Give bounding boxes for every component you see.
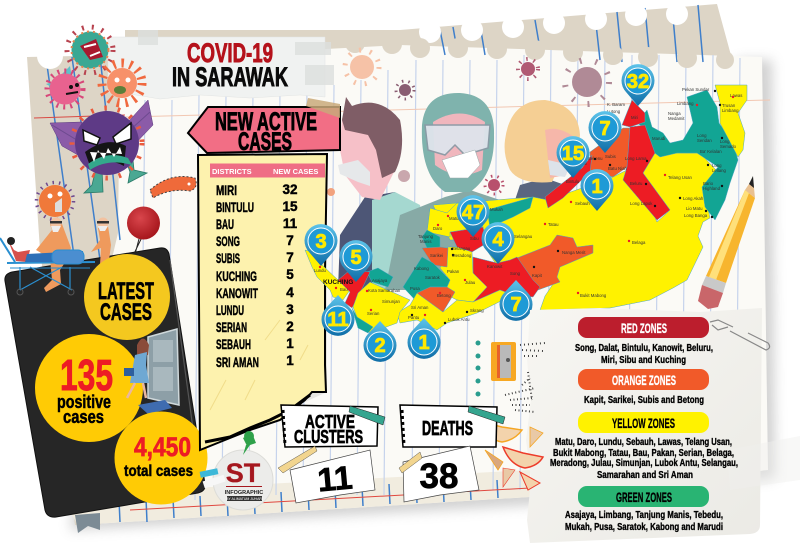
orange Betong — [417, 287, 455, 312]
map place labels: Miri — [631, 115, 638, 120]
panel: new active cases table: 7 — [286, 233, 294, 248]
deaths number note: 38 — [420, 457, 458, 496]
faint background viruses — [327, 50, 609, 196]
map place labels: Limbang — [722, 108, 739, 113]
icon: orange virus — [102, 63, 142, 103]
red Kuching — [338, 270, 370, 308]
green zones: Asajaya, Limbang, Tanjung Manis, Tebedu, — [565, 509, 723, 521]
map place labels: Lio Matu — [686, 206, 703, 211]
map place labels: Bintulu — [566, 179, 580, 184]
orange Kapit — [517, 235, 593, 290]
icon: safety pin — [710, 320, 770, 350]
map place labels: Meradong — [452, 253, 472, 258]
green Mukah — [487, 197, 533, 227]
pin: Sri Aman 1 — [408, 318, 440, 359]
green Tebedu — [352, 308, 373, 333]
map place labels: Tatau — [548, 222, 559, 227]
red Bintulu — [545, 155, 592, 208]
orange Sarikei — [422, 247, 448, 267]
map place labels: Belaga — [632, 240, 646, 245]
ST logo badge: BY ALIMATUM JUHARI — [226, 497, 263, 501]
pencil dust — [505, 343, 545, 412]
icon: medics with stretcher — [0, 218, 111, 296]
map place labels: Long Akah — [683, 196, 704, 201]
table rows: SUBIS — [216, 251, 240, 266]
map place labels: Batu Niah — [608, 166, 627, 171]
panel: new active cases table: 1 — [286, 353, 294, 368]
map place labels: Nanga — [668, 111, 681, 116]
map place labels: Semado — [720, 144, 737, 149]
panel: people — [338, 93, 580, 290]
pin: Subis 7: 7 — [599, 118, 611, 140]
icon: red pin — [127, 206, 160, 262]
icon: purple bat virus — [50, 100, 153, 193]
map place labels: Trusan — [722, 103, 736, 108]
red zones — [575, 317, 713, 366]
map place labels: Lellang — [712, 168, 726, 173]
map place labels: Kabong — [414, 266, 429, 271]
table rows: MIRI — [216, 183, 237, 198]
map place labels: Julau — [465, 280, 476, 285]
map place labels: Medamit — [668, 116, 685, 121]
orange zones — [578, 369, 709, 406]
yellow zones — [550, 412, 738, 481]
map place labels: Sebauh — [575, 201, 590, 206]
map place labels: Bekenu — [588, 156, 603, 161]
map place labels: Sarikei — [430, 253, 443, 258]
pin: Kanowit 4 — [482, 222, 514, 264]
map place labels: Pakan — [447, 269, 460, 274]
yellow Daro Matu — [427, 203, 483, 237]
icon: small orange virus — [36, 182, 74, 220]
map place labels: Ba' Kelalan — [700, 149, 722, 154]
table rows: BINTULU — [216, 200, 254, 215]
map place labels: Long Lapok — [630, 201, 653, 206]
panel: new active cases table: 15 — [282, 199, 298, 214]
map place labels: Song — [510, 271, 521, 276]
map place labels: Bau — [340, 287, 348, 292]
yellow zones: Samarahan and Sri Aman — [597, 469, 693, 481]
table rows — [216, 183, 259, 370]
red Miri — [622, 100, 645, 127]
map place labels: Serian — [367, 311, 380, 316]
circle: positive cases: cases — [63, 407, 104, 427]
map place labels: Daro — [433, 226, 443, 231]
icon: pencil — [698, 176, 755, 309]
map place labels: Lutong — [607, 109, 621, 114]
map place labels: Pantu — [408, 315, 420, 320]
map place labels: Saratok — [425, 275, 441, 280]
map place labels: Sri Aman — [411, 305, 429, 310]
panel: new active cases table: 32 — [282, 182, 298, 197]
green zones: Mukah, Pusa, Saratok, Kabong and Marudi — [565, 521, 723, 533]
pin: Kanowit 4: 4 — [492, 229, 504, 251]
red zones: Miri, Sibu and Kuching — [601, 354, 686, 366]
title strip — [108, 30, 334, 99]
circle: total cases: 4,450 — [134, 432, 191, 462]
orange zones: Kapit, Sarikei, Subis and Betong — [584, 394, 704, 406]
map place labels: Selangau — [452, 246, 471, 251]
title strip: IN SARAWAK — [172, 62, 288, 92]
map place labels: Betong — [437, 293, 451, 298]
map place labels: Lubok Antu — [448, 317, 470, 322]
yellow zones: Bukit Mabong, Tatau, Bau, Pakan, Serian, Belaga, — [553, 447, 734, 459]
map place labels: Highland — [703, 186, 721, 191]
map place labels: Lawas — [730, 93, 742, 98]
pin: Kuching 5: 5 — [350, 247, 362, 269]
pin: Serian 2: 2 — [374, 335, 386, 357]
clusters label card: CLUSTERS — [294, 427, 363, 447]
table rows: SERIAN — [216, 320, 247, 335]
yellow zones: YELLOW ZONES — [612, 415, 675, 431]
circle: total cases: total cases — [124, 463, 193, 480]
pin: Song 7: 7 — [510, 294, 522, 316]
map place labels — [314, 87, 742, 324]
yellow Sri Aman — [397, 290, 513, 330]
map place labels: Manis — [420, 239, 431, 244]
table rows: KANOWIT — [216, 286, 258, 301]
green zones: GREEN ZONES — [616, 489, 672, 505]
panel: zone legend — [526, 308, 800, 543]
panel: new active cases table: 1 — [286, 336, 294, 351]
title strip: COVID-19 — [187, 38, 273, 68]
pin: Sibu 47: 47 — [462, 202, 484, 224]
table rows: BAU — [216, 217, 234, 232]
table rows: SONG — [216, 234, 240, 249]
map place labels: Long — [720, 139, 730, 144]
panel: new active cases table: DISTRICTS — [212, 167, 252, 176]
map place labels: Seridan — [697, 138, 712, 143]
viruses top-left — [36, 27, 196, 220]
pin: Serian 2 — [364, 321, 396, 362]
circle: positive cases: positive — [57, 392, 111, 412]
teal dots — [476, 340, 480, 396]
map place labels: Limbang — [677, 101, 694, 106]
map place labels: Long Lama — [625, 156, 647, 161]
circle: latest cases — [84, 254, 170, 340]
pin: Bau 11: 11 — [327, 309, 349, 331]
map place labels: Matu — [449, 216, 459, 221]
pin: Bau 11 — [322, 295, 354, 336]
pin: Sebauh 1 — [580, 169, 614, 211]
icon: caterpillar virus — [150, 176, 196, 198]
pin: Sebauh 1: 1 — [591, 176, 603, 198]
map place labels: Long — [712, 163, 722, 168]
map place labels: Mukah — [490, 207, 504, 212]
map place labels: Lundu — [314, 268, 327, 273]
red zones: Song, Dalat, Bintulu, Kanowit, Beluru, — [575, 342, 713, 354]
circle: positive cases — [35, 334, 143, 442]
panel: new active cases table: 7 — [286, 250, 294, 265]
map of Sarawak — [305, 85, 747, 333]
yellow zones: Meradong, Julau, Simunjan, Lubok Antu, Selangau, — [550, 457, 738, 469]
map place labels: Nanga Merit — [562, 250, 586, 255]
icon: teal virus — [67, 27, 113, 73]
pin: Bintulu 15: 15 — [562, 143, 584, 165]
icon: sharpener — [491, 342, 516, 381]
map place labels: Simunjan — [382, 299, 401, 304]
map place labels: K. Baram — [607, 102, 625, 107]
yellow Serian — [353, 282, 410, 333]
panel: deaths — [399, 405, 505, 502]
green Kabong — [403, 257, 450, 302]
map place labels: KUCHING — [323, 279, 353, 286]
map place labels: Beluru — [630, 181, 643, 186]
map place labels: Suai — [578, 161, 587, 166]
panel: new active cases table: 5 — [286, 267, 294, 282]
red Beluru — [623, 125, 670, 220]
panel: new active cases table: 2 — [286, 319, 294, 334]
map place labels: Bukit Mabong — [580, 293, 607, 298]
map place labels: Kota Samarahan — [368, 288, 401, 293]
icon: girl at door — [124, 329, 179, 414]
pin: Song 7 — [500, 280, 532, 321]
circle: total cases — [114, 412, 208, 504]
map place labels: Selangau — [514, 234, 533, 239]
map place labels: Bario — [703, 181, 714, 186]
pin: Miri 32 — [622, 64, 654, 106]
panel: new active cases table: 4 — [286, 285, 294, 300]
pin: Sri Aman 1: 1 — [418, 332, 430, 354]
icon: pencil shavings — [482, 422, 543, 490]
medic in protective suit — [385, 93, 530, 290]
panel: new active cases table: 3 — [286, 302, 294, 317]
map place labels: Subis — [605, 154, 616, 159]
map place labels: Pusa — [410, 286, 420, 291]
clusters label card — [281, 405, 385, 447]
red Kanowit and Song — [473, 257, 540, 302]
panel: tablet — [5, 248, 205, 517]
green Tanjung Manis — [422, 230, 440, 250]
pin: Bintulu 15 — [556, 136, 590, 178]
green north-east — [637, 90, 738, 220]
map place labels: Tanjung — [418, 234, 434, 239]
green Asajaya — [367, 268, 393, 287]
orange zones: ORANGE ZONES — [612, 372, 676, 388]
table rows: SRI AMAN — [216, 355, 259, 370]
map place labels: Telang Usan — [668, 175, 692, 180]
banner: new active cases: NEW ACTIVE — [215, 108, 317, 136]
clusters label card: ACTIVE — [305, 412, 355, 432]
pin: Kuching 5 — [340, 240, 372, 282]
icon: pink virus — [46, 66, 83, 107]
map place labels: Long — [697, 133, 707, 138]
map place labels: Asajaya — [372, 278, 388, 283]
map place labels: Sibu — [470, 236, 479, 241]
banner: new active cases — [188, 98, 340, 156]
list paper shadow — [198, 154, 327, 450]
red Sibu — [450, 227, 487, 252]
green zones — [565, 486, 723, 533]
blonde woman — [505, 100, 580, 200]
map place labels: Skrang — [470, 308, 484, 313]
ST logo badge: ST — [226, 458, 261, 488]
yellow Lundu Bau — [305, 250, 350, 300]
banner: new active cases: CASES — [238, 128, 292, 156]
map place labels: Kapit — [532, 273, 543, 278]
panel: active clusters — [278, 405, 385, 503]
circle: latest cases: CASES — [100, 299, 152, 326]
yellow zones: Matu, Daro, Lundu, Sebauh, Lawas, Telang Usan, — [555, 436, 732, 448]
circle: positive cases: 135 — [60, 351, 113, 400]
panel: new active cases table: 11 — [283, 216, 298, 231]
map place labels: Long Banga — [684, 213, 708, 218]
table rows: LUNDU — [216, 303, 244, 318]
deaths label card: DEATHS — [422, 418, 473, 440]
man — [338, 97, 425, 290]
table header — [210, 164, 325, 178]
clusters number note: 11 — [316, 459, 354, 498]
map place labels: Kanowit — [487, 264, 503, 269]
pin: Lundu 3: 3 — [315, 231, 327, 253]
table rows: SEBAUH — [216, 337, 251, 352]
ST logo badge — [200, 431, 273, 510]
map place labels: Marudi — [652, 136, 665, 141]
map place labels: Pekan Sundar — [682, 87, 710, 92]
ST logo badge: INFOGRAPHIC — [225, 490, 263, 496]
table rows: KUCHING — [216, 269, 257, 284]
pin: Miri 32: 32 — [627, 71, 649, 93]
panel: new active cases table — [198, 154, 327, 450]
pin: Lundu 3 — [304, 224, 338, 266]
pin: Subis 7 — [588, 111, 622, 153]
red zones: RED ZONES — [621, 320, 667, 336]
yellow central region — [433, 153, 716, 310]
yellow Lawas — [715, 85, 747, 157]
panel: new active cases table: NEW CASES — [273, 167, 318, 176]
circle: latest cases: LATEST — [98, 278, 154, 305]
pin: Sibu 47 — [456, 195, 490, 237]
bookmark tab — [75, 513, 100, 533]
orange Subis — [590, 128, 630, 177]
yellow Pakan Julau — [440, 247, 487, 302]
